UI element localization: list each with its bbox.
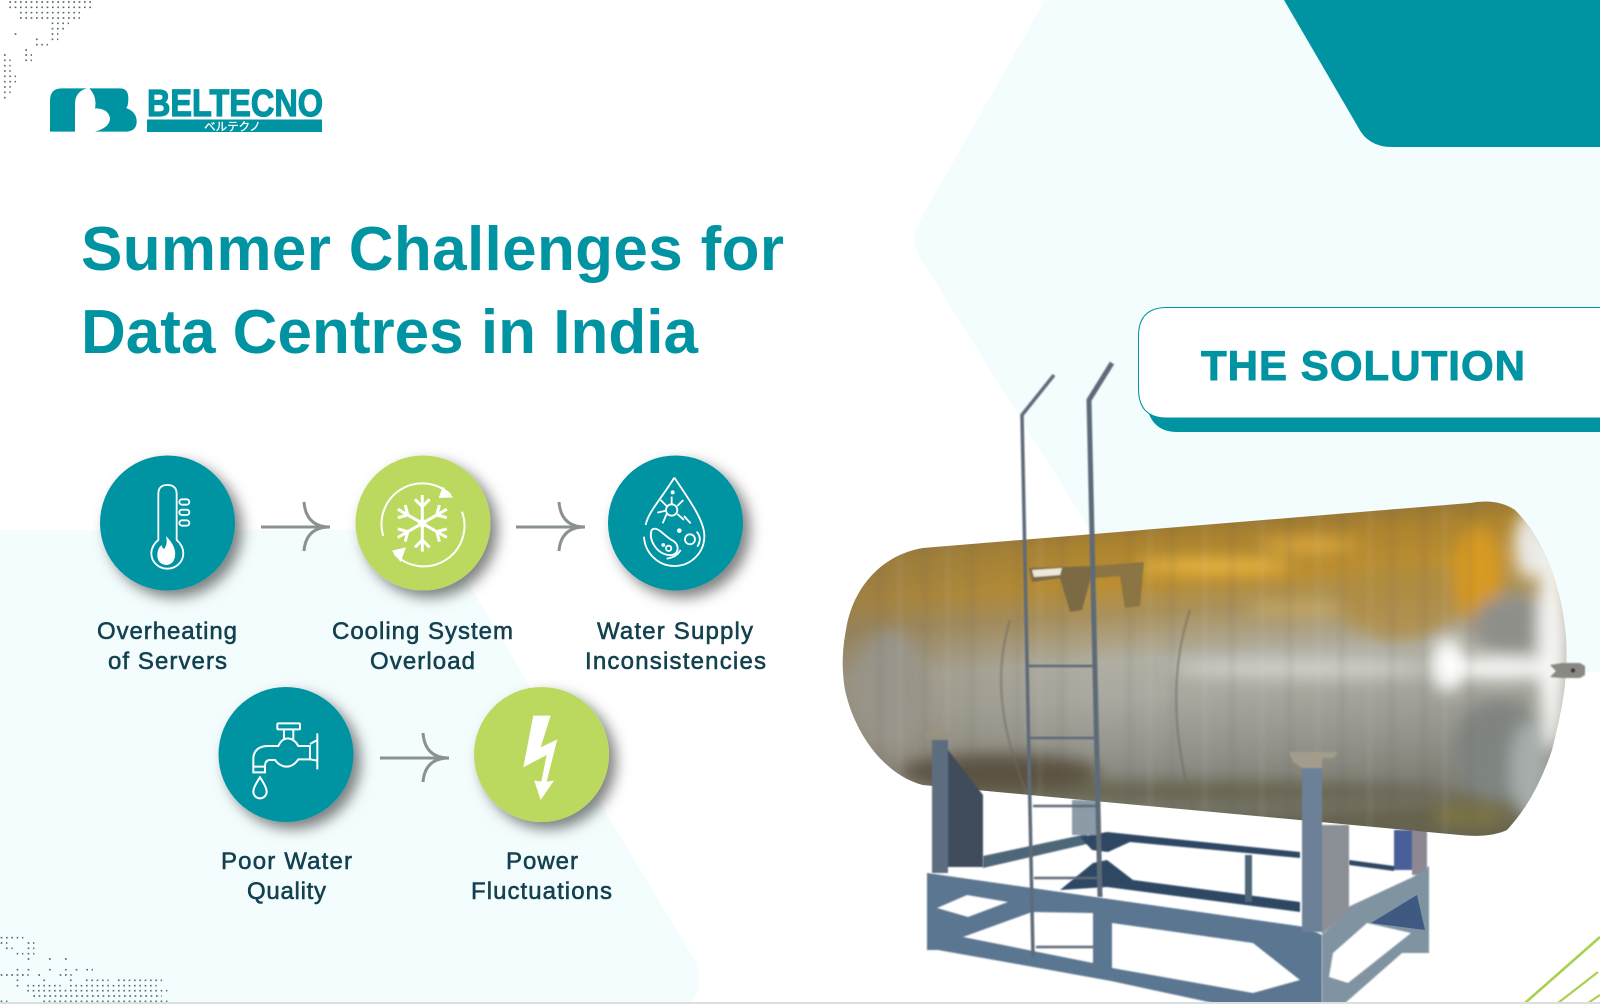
step: poor water quality bbox=[218, 687, 354, 905]
step: overheating of servers bbox=[97, 456, 237, 675]
background shape: pale hexagon upper right bbox=[914, 0, 1600, 672]
step: water supply inconsistencies bbox=[585, 456, 766, 675]
icon: thermometer with flame bbox=[151, 485, 189, 569]
arrow bbox=[516, 502, 585, 551]
label bbox=[471, 848, 612, 905]
label: of Servers bbox=[108, 648, 227, 675]
circle bbox=[218, 687, 354, 822]
icon: water drop with microbes bbox=[644, 478, 704, 566]
logo mark bbox=[50, 88, 137, 132]
tank top brackets bbox=[1029, 562, 1144, 612]
label: Fluctuations bbox=[471, 878, 612, 905]
callout teal underlay bbox=[1147, 395, 1600, 432]
tank nozzle bbox=[1550, 663, 1585, 678]
callout: the solution bbox=[1138, 308, 1600, 432]
callout white card bbox=[1138, 308, 1600, 418]
label: Quality bbox=[247, 878, 326, 905]
decoration: bottom edge line bbox=[0, 1002, 1600, 1004]
tank body bbox=[842, 502, 1566, 836]
frame: right side bbox=[1322, 866, 1429, 1004]
frame: left post bbox=[925, 733, 983, 873]
title: Data Centres in India bbox=[81, 298, 699, 367]
frame: right gusset bbox=[1371, 895, 1425, 930]
circle bbox=[608, 456, 743, 590]
logo bar with katakana bbox=[147, 120, 322, 134]
arrow bbox=[380, 733, 449, 782]
illustration: horizontal stainless steel tank on frame bbox=[830, 363, 1590, 1004]
logo: Beltecno bbox=[50, 83, 323, 134]
label bbox=[97, 618, 237, 675]
tank vertical brushed streaks bbox=[947, 505, 1472, 682]
frame: front face bbox=[927, 873, 1322, 1004]
tank rear frame bbox=[983, 800, 1427, 912]
logo wordmark: BELTECNO bbox=[147, 83, 323, 125]
circle bbox=[474, 687, 609, 822]
circle bbox=[100, 456, 235, 590]
arrow bbox=[261, 502, 330, 551]
logo bar with katakana: ベルテクノ bbox=[204, 120, 261, 134]
label bbox=[585, 618, 766, 675]
label: Cooling System bbox=[332, 618, 513, 645]
frame: front-right post bbox=[1289, 752, 1349, 935]
label bbox=[221, 848, 352, 905]
label: Inconsistencies bbox=[585, 648, 766, 675]
label: Water Supply bbox=[597, 618, 753, 645]
background shape: pale polygon lower left bbox=[0, 530, 699, 1004]
ladder bbox=[1022, 363, 1112, 957]
decoration: green diagonal lines bottom right bbox=[1525, 937, 1600, 1003]
step: power fluctuations bbox=[471, 687, 612, 905]
decoration: dot pattern bottom left bbox=[1, 938, 167, 1001]
label: Power bbox=[506, 848, 578, 875]
icon: dripping tap bbox=[253, 723, 317, 798]
label: Overload bbox=[370, 648, 475, 675]
decoration: dot pattern top left bbox=[4, 2, 91, 98]
title bbox=[81, 215, 784, 367]
label bbox=[332, 618, 513, 675]
callout heading: THE SOLUTION bbox=[1201, 342, 1525, 389]
circle bbox=[356, 456, 490, 590]
label: Poor Water bbox=[221, 848, 352, 875]
icon: snowflake in rotating arrows bbox=[382, 483, 464, 566]
title: Summer Challenges for bbox=[81, 215, 784, 284]
icon: lightning bolt bbox=[523, 716, 557, 800]
decoration: teal corner shape top right bbox=[1284, 0, 1600, 147]
label: Overheating bbox=[97, 618, 237, 645]
step: cooling system overload bbox=[332, 456, 513, 675]
